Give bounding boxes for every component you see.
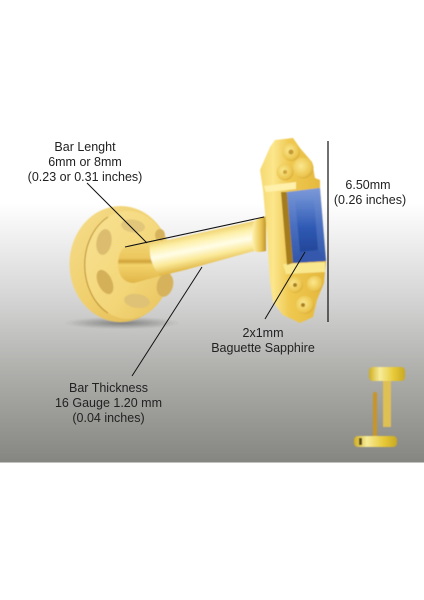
bottom part: [354, 392, 397, 447]
jewelry: labret stud: [64, 138, 326, 329]
label: bar length: 6mm or 8mm: [48, 155, 122, 169]
label: sapphire: Baguette Sapphire: [211, 341, 315, 355]
top part: [369, 367, 405, 427]
back disc: [70, 206, 176, 322]
decorative plate: [260, 138, 326, 323]
collar: [252, 216, 266, 252]
stub: [118, 240, 160, 283]
label: height: 6.50mm: [345, 178, 391, 192]
label: bar thickness: 16 Gauge 1.20 mm: [55, 396, 162, 410]
sapphire gem: [287, 188, 326, 263]
leader line: bar length span: [125, 217, 264, 247]
label: bar length: (0.23 or 0.31 inches): [28, 170, 142, 184]
plate highlights: [264, 182, 296, 192]
bar: [150, 221, 254, 276]
leader line: bar thickness: [132, 267, 202, 376]
label: bar thickness: Bar Thickness: [69, 381, 148, 395]
dimension line: height: [327, 141, 329, 322]
bottom beads: [287, 276, 323, 314]
disc shadow: [64, 317, 180, 329]
label: bar length: Bar Lenght: [54, 140, 116, 154]
top beads: [276, 143, 314, 180]
label: sapphire: 2x1mm: [243, 326, 283, 340]
label: bar thickness: (0.04 inches): [72, 411, 145, 425]
gem setting: [281, 192, 293, 265]
background panel: [0, 138, 424, 462]
leader line: sapphire: [265, 252, 305, 319]
label: height: (0.26 inches): [334, 193, 406, 207]
thumbnail: disassembled parts: [354, 367, 405, 447]
leader line: bar length: [87, 183, 147, 243]
